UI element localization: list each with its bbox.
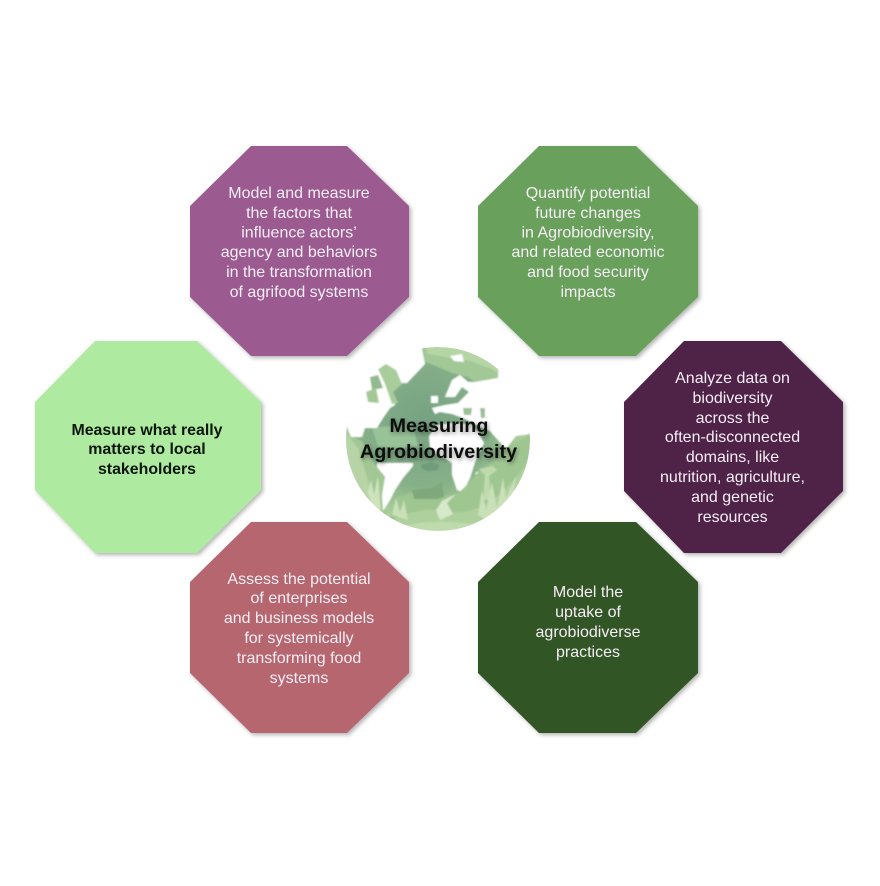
text: analyze data: often-disconnected [665, 429, 800, 446]
text: analyze data: and genetic [691, 489, 774, 506]
text: quantify potential: future changes [535, 205, 641, 222]
text: quantify potential: Quantify potential [526, 185, 650, 202]
panel: disconnected data domains [624, 341, 843, 553]
text: quantify potential: and food security [527, 264, 649, 281]
text: analyze data: biodiversity [692, 390, 773, 407]
text: model the uptake: uptake of [555, 604, 621, 621]
panel: future changes [478, 146, 698, 356]
panel: enterprises and business models [190, 522, 409, 733]
text: measure what really matters: matters to local [88, 441, 206, 458]
text: assess the potential: and business models [224, 610, 374, 627]
panel: factors influencing actors [190, 146, 409, 356]
title: measuring agrobiodiversity: Measuring [390, 415, 488, 437]
text: quantify potential: impacts [560, 284, 616, 301]
text: assess the potential: for systemically [244, 630, 354, 647]
text: measure what really matters: stakeholders [98, 461, 196, 478]
text: model the uptake: practices [556, 644, 620, 661]
text: assess the potential: transforming food [237, 650, 361, 667]
panel: uptake of practices [478, 522, 698, 733]
text: model and measure: the factors that [246, 205, 352, 222]
text: analyze data: nutrition, agriculture, [660, 469, 805, 486]
text: model and measure: Model and measure [228, 185, 370, 202]
title: measuring agrobiodiversity: Agrobiodiversity [360, 441, 517, 463]
text: quantify potential: in Agrobiodiversity, [521, 224, 655, 242]
text: analyze data: across the [696, 410, 770, 427]
icon: globe with landscape [346, 347, 530, 531]
text: assess the potential: of enterprises [251, 590, 347, 607]
text: assess the potential: systems [270, 670, 328, 687]
text: analyze data: domains, like [686, 449, 779, 466]
text: quantify potential: and related economic [512, 244, 664, 261]
text: model and measure: of agrifood systems [230, 284, 368, 301]
text: model and measure: in the transformation [226, 264, 372, 281]
text: model the uptake: Model the [553, 584, 623, 601]
text: model the uptake: agrobiodiverse [536, 624, 641, 641]
text: analyze data: resources [697, 509, 768, 526]
text: measure what really matters: Measure what really [71, 422, 223, 439]
text: analyze data: Analyze data on [675, 370, 790, 387]
panel: local stakeholders [35, 341, 261, 553]
text: assess the potential: Assess the potential [227, 571, 371, 588]
text: model and measure: influence actors’ [241, 224, 357, 242]
text: model and measure: agency and behaviors [221, 244, 377, 261]
